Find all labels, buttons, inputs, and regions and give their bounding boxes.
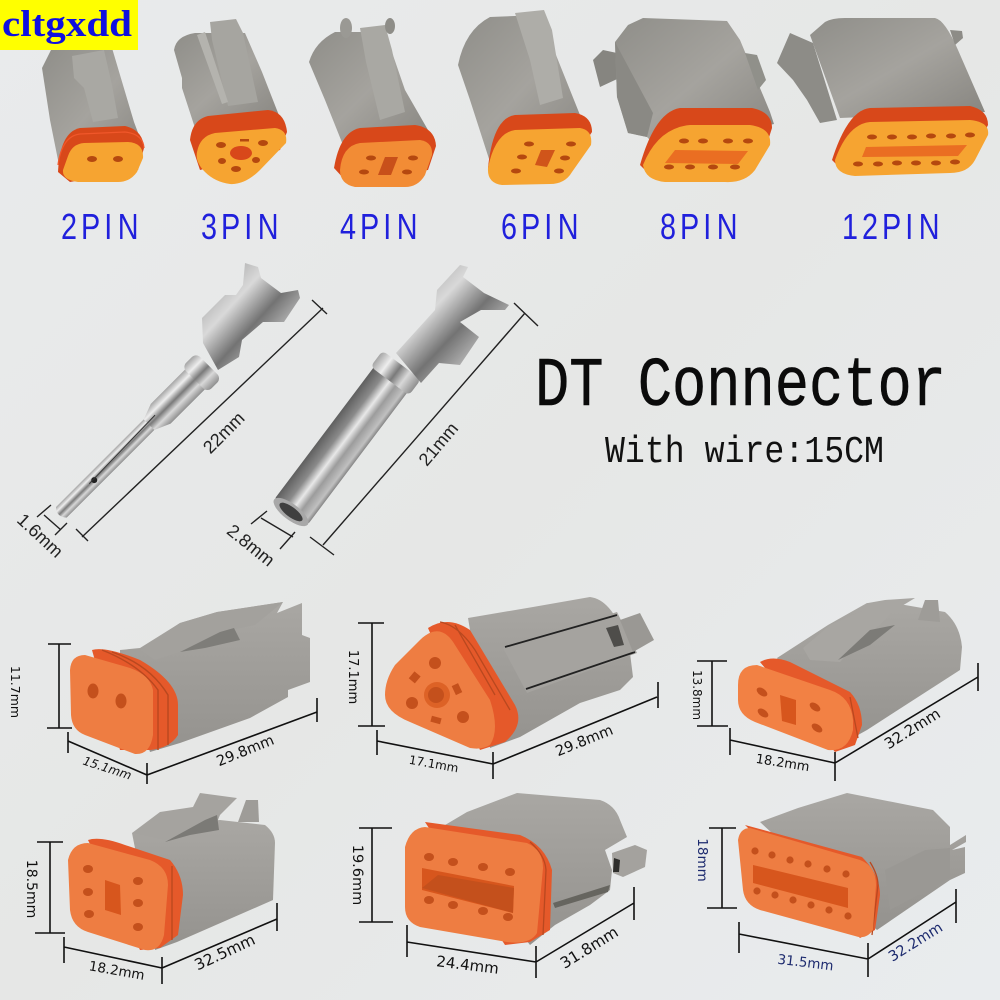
pin count labels: 4PIN [340,206,418,247]
connector: 8-pin dimensioned [405,793,647,945]
subtitle: With wire:15CM [605,431,884,474]
dimensions: 6-pin: 18.2mm [88,958,146,984]
dimensions: 3-pin: 17.1mm [345,650,360,704]
dimensions: 4-pin: 13.8mm [690,670,704,720]
dimensions: 2-pin: 29.8mm [214,733,277,770]
connector: 6-pin dimensioned [68,793,275,950]
dimensions: 8-pin: 19.6mm [349,845,365,905]
dimensions: 3-pin: 29.8mm [553,723,616,760]
connector: 4-pin dimensioned [738,598,962,752]
connector: 4PIN photo [309,18,436,187]
pin dimensions: 1.6mm [13,510,67,562]
dimensions: 6-pin: 18.5mm [23,860,39,918]
connector: 12-pin dimensioned [738,793,966,938]
socket pin terminal [267,265,509,533]
brand badge: cltgxdd [2,4,132,45]
brand badge [0,0,138,50]
male pin terminal [47,263,300,528]
pin dimensions [13,300,538,570]
dimensions: 3-pin: 17.1mm [408,753,460,775]
dimensions: 4-pin: 18.2mm [755,752,811,775]
dimensions: 2-pin: 15.1mm [81,754,133,783]
connector: 12PIN photo [777,18,988,176]
pin count labels: 2PIN [61,206,139,247]
dimensions: 12-pin: 32.2mm [886,920,946,965]
dimensions: 8-pin [349,828,634,978]
dimensions: 6-pin: 32.5mm [192,931,258,974]
pin count labels: 6PIN [501,206,579,247]
dimensions: 3-pin [345,623,658,779]
pin count labels [61,206,940,247]
dimensions: 12-pin [694,828,956,977]
pin dimensions: 21mm [415,419,462,470]
dimensions: 6-pin [23,842,277,984]
pin count labels: 8PIN [660,206,738,247]
connector: 2-pin dimensioned [70,602,310,754]
dimensions: 2-pin: 11.7mm [8,666,23,718]
pin dimensions: 2.8mm [223,520,278,570]
connector: 8PIN photo [593,18,774,182]
pin count labels: 3PIN [201,206,279,247]
dimensions: 2-pin [8,644,317,784]
dimensions: 4-pin: 32.2mm [881,705,944,753]
connector: 2PIN photo [42,48,144,182]
dimensions: 8-pin: 31.8mm [557,923,622,973]
connector: 6PIN photo [458,10,592,185]
connector: 3-pin dimensioned [385,597,654,750]
pin count labels: 12PIN [842,206,940,247]
connector: 3PIN photo [174,19,287,184]
dimensions: 12-pin: 31.5mm [777,952,834,974]
pin dimensions: 22mm [199,408,249,458]
dimensions: 4-pin [690,661,978,781]
dimensions: 12-pin: 18mm [694,838,710,882]
dimensions: 8-pin: 24.4mm [435,952,500,978]
